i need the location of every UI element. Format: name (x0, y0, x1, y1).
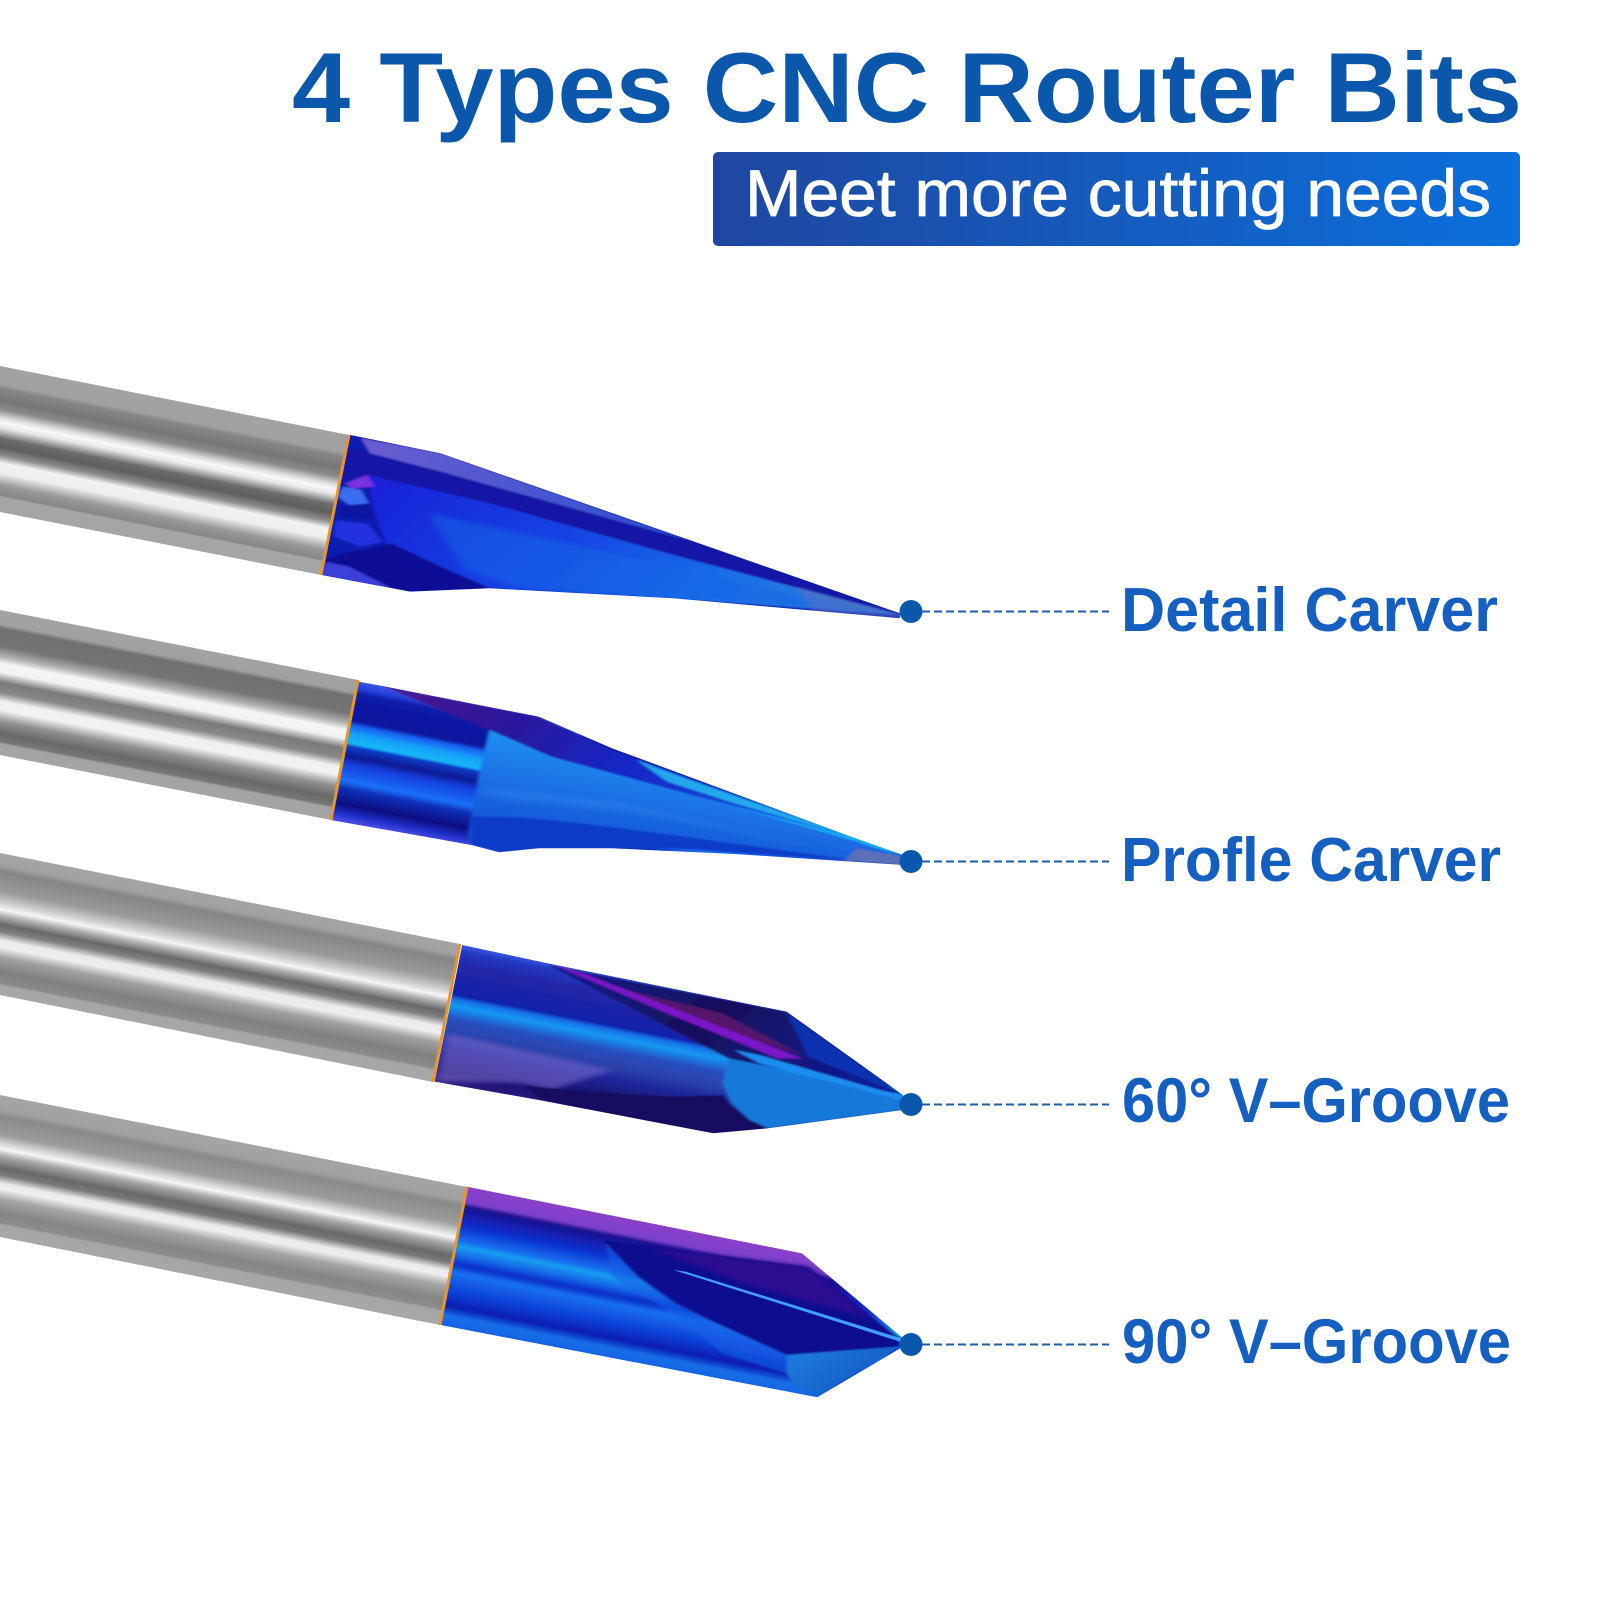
callout: detail carver: Detail Carver (1121, 576, 1498, 645)
callout: detail carver (900, 576, 1498, 645)
callout: 90 degree V-groove (900, 1307, 1511, 1377)
router bit 2: profile carver (0, 610, 918, 877)
router bit 1: detail carver (0, 366, 918, 630)
router bit 4: 90 degree V-groove (0, 1095, 918, 1403)
title: 4 Types CNC Router Bits (292, 32, 1522, 143)
callout: 60 degree V-groove: 60° V–Groove (1122, 1066, 1510, 1136)
callout: profile carver (900, 826, 1501, 895)
callout: 90 degree V-groove: 90° V–Groove (1122, 1307, 1511, 1377)
callout: 60 degree V-groove (900, 1066, 1510, 1136)
router bit 3: 60 degree V-groove (0, 853, 912, 1140)
subtitle badge: Meet more cutting needs (745, 156, 1491, 230)
callout: profile carver: Profle Carver (1121, 826, 1501, 895)
